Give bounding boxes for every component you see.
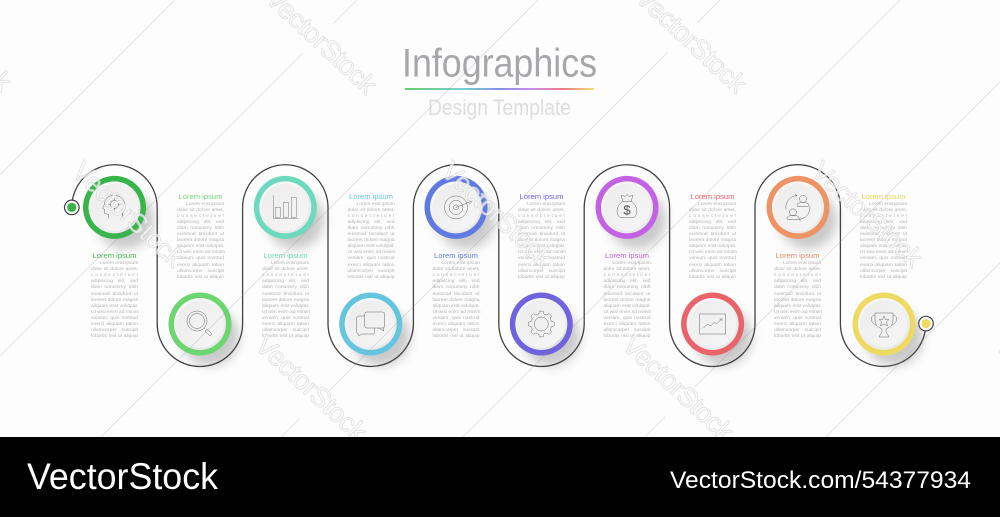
- icon: target: [444, 196, 472, 219]
- text block: step 9: adipiscing elit, sed: [774, 279, 821, 284]
- text block: step 8: dolor sit dolore amet,: [689, 208, 736, 213]
- text block: step 8: lobortis nisl ut aliquip: [689, 275, 736, 280]
- text block: step 4: euismod tincidunt ut: [348, 232, 394, 237]
- text block: step 9: Ut wisi enim ad minim: [774, 310, 822, 315]
- step 5 circle: target icon: [424, 176, 488, 239]
- step 6 circle: gear icon: [510, 292, 573, 356]
- text block: step 8: veniam, quis nostrud: [689, 256, 736, 261]
- text block: step 6: euismod tincidunt ut: [518, 232, 565, 237]
- text block: step 9: Lorem erat ipsum: [783, 261, 821, 266]
- text block: step 7: aliquam erat volutpat.: [604, 304, 651, 309]
- text block: step 2: Lorem ipsum: [179, 192, 222, 200]
- text block: step 6: consectetuer: [518, 214, 567, 219]
- icon: trophy: [871, 313, 897, 337]
- text block: step 4: adipiscing elit, sed: [348, 220, 394, 225]
- text block: step 3: ullamcorper suscipit: [262, 328, 309, 333]
- text block: step 6: ullamcorper suscipit: [518, 269, 565, 274]
- text block: step 5: dolor sit dolore amet,: [432, 267, 480, 272]
- icon: bar chart: [273, 195, 298, 218]
- text block: step 10: aliquam erat volutpat.: [860, 244, 907, 249]
- text block: step 4: exerci aliquam tation: [348, 263, 394, 268]
- text block: step 8: [689, 192, 738, 280]
- text block: step 7: euismod tincidunt ut: [604, 292, 650, 297]
- text block: step 7: consectetuer: [604, 273, 652, 278]
- text block: step 9: Lorem ipsum: [776, 251, 819, 260]
- text block: step 1: laoreet dolore magna: [91, 298, 138, 303]
- text block: step 5: Lorem ipsum: [434, 251, 478, 260]
- icon: head with gear: [102, 195, 125, 218]
- text block: step 1: lobortis nisl ut aliquip: [91, 334, 138, 339]
- text block: step 10: Lorem erat ipsum: [869, 202, 907, 206]
- text block: step 2: Ut wisi enim ad minim: [177, 250, 225, 255]
- brand name: VectorStock: [27, 456, 218, 497]
- text block: step 6: dolor sit dolore amet,: [518, 208, 565, 213]
- text block: step 9: veniam, quis nostrud: [774, 316, 821, 321]
- text block: step 2: [177, 192, 226, 280]
- image url: VectorStock.com/54377934: [670, 467, 971, 494]
- text block: step 10: lobortis nisl ut aliquip: [860, 275, 907, 280]
- step 2 circle: magnifier icon: [168, 292, 232, 356]
- subtitle: Design Template: [428, 95, 571, 120]
- text block: step 10: [860, 192, 909, 280]
- step shadows: [96, 191, 923, 366]
- step 1 circle: head with gear icon: [83, 176, 146, 239]
- text block: step 1: consectetuer: [91, 273, 140, 278]
- text block: step 9: exerci aliquam tation: [774, 322, 821, 327]
- text block: step 8: euismod tincidunt ut: [689, 232, 736, 237]
- text block: step 9: ullamcorper suscipit: [774, 328, 821, 333]
- text block: step 4: ullamcorper suscipit: [348, 269, 394, 274]
- text block: step 4: dolor sit dolore amet,: [348, 208, 394, 213]
- watermark overlay: VectorStock: [67, 156, 190, 273]
- text block: step 5: laoreet dolore magna: [432, 298, 480, 303]
- text block: step 9: euismod tincidunt ut: [774, 292, 821, 297]
- text block: step 7: dolor sit dolore amet,: [604, 267, 650, 272]
- text block: step 6: veniam, quis nostrud: [518, 256, 565, 261]
- step 8 circle: line chart icon: [681, 292, 744, 356]
- text block: step 3: Ut wisi enim ad minim: [262, 310, 310, 315]
- text block: step 10: exerci aliquam tation: [860, 263, 907, 268]
- text block: step 3: euismod tincidunt ut: [262, 292, 309, 297]
- text block: step 1: aliquam erat volutpat.: [91, 304, 138, 309]
- text block: step 4: aliquam erat volutpat.: [348, 244, 395, 249]
- text block: step 1: Ut wisi enim ad minim: [91, 310, 139, 315]
- text block: step 6: exerci aliquam tation: [518, 263, 565, 268]
- text block: step 5: euismod tincidunt ut: [432, 292, 480, 297]
- text block: step 5: consectetuer: [432, 273, 481, 278]
- text block: step 2: adipiscing elit, sed: [177, 220, 224, 225]
- text block: step 5: diam nonummy nibh: [432, 285, 480, 290]
- footer banner: [0, 437, 1000, 517]
- step 4 circle: speech bubbles icon: [339, 292, 402, 356]
- text block: step 3: veniam, quis nostrud: [262, 316, 309, 321]
- text block: step 6: laoreet dolore magna: [518, 238, 565, 243]
- text block: step 3: aliquam erat volutpat.: [262, 304, 309, 309]
- text block: step 10: laoreet dolore magna: [860, 238, 907, 243]
- text block: step 7: adipiscing elit, sed: [604, 279, 650, 284]
- text block: step 5: aliquam erat volutpat.: [432, 304, 480, 309]
- text block: step 5: lobortis nisl ut aliquip: [432, 334, 480, 339]
- text block: step 5: [432, 251, 481, 339]
- text block: step 3: [262, 251, 311, 339]
- text block: step 4: [348, 192, 396, 280]
- text block: step 1: euismod tincidunt ut: [91, 292, 138, 297]
- text block: step 9: aliquam erat volutpat.: [774, 304, 821, 309]
- title gradient rule: [405, 88, 594, 90]
- title: Infographics: [402, 42, 597, 86]
- text block: step 5: ullamcorper suscipit: [432, 328, 480, 333]
- text block: step 6: Ut wisi enim ad minim: [518, 250, 566, 255]
- text block: step 7: laoreet dolore magna: [604, 298, 650, 303]
- text block: step 4: diam nonummy nibh: [348, 226, 394, 231]
- text block: step 2: ullamcorper suscipit: [177, 269, 224, 274]
- text block: step 7: Lorem erat ipsum: [612, 261, 651, 266]
- text block: step 8: diam nonummy nibh: [689, 226, 736, 231]
- text block: step 6: [518, 192, 567, 280]
- step 7 circle: money bag icon: [596, 176, 658, 239]
- text block: step 6: Lorem ipsum: [520, 192, 563, 200]
- text block: step 1: diam nonummy nibh: [91, 285, 138, 290]
- text block: step 8: ullamcorper suscipit: [689, 269, 736, 274]
- step 10 circle: trophy icon: [852, 292, 916, 356]
- text block: step 5: Lorem erat ipsum: [442, 261, 480, 266]
- text block: step 3: lobortis nisl ut aliquip: [262, 334, 309, 339]
- text block: step 8: adipiscing elit, sed: [689, 220, 736, 225]
- text block: step 3: Lorem ipsum: [264, 251, 307, 260]
- start dot: [64, 200, 79, 215]
- text block: step 10: Lorem ipsum: [862, 192, 905, 200]
- text block: step 5: exerci aliquam tation: [432, 322, 480, 327]
- text block: step 7: Lorem ipsum: [605, 251, 649, 260]
- text block: step 8: laoreet dolore magna: [689, 238, 736, 243]
- step 9 circle: people cycle icon: [766, 176, 830, 239]
- text block: step 2: dolor sit dolore amet,: [177, 208, 224, 213]
- watermark overlay: VectorStock: [436, 156, 559, 273]
- text block: step 8: consectetuer: [689, 214, 738, 219]
- text block: step 10: dolor sit dolore amet,: [860, 208, 907, 213]
- text block: step 9: diam nonummy nibh: [774, 285, 821, 290]
- winding timeline path: [72, 165, 926, 366]
- text block: step 6: adipiscing elit, sed: [518, 220, 565, 225]
- text block: step 8: Lorem ipsum: [691, 192, 734, 200]
- text block: step 3: diam nonummy nibh: [262, 285, 309, 290]
- text block: step 10: euismod tincidunt ut: [860, 232, 907, 237]
- text block: step 3: consectetuer: [262, 273, 311, 278]
- text block: step 6: aliquam erat volutpat.: [518, 244, 565, 249]
- text block: step 3: dolor sit dolore amet,: [262, 267, 309, 272]
- text block: step 2: laoreet dolore magna: [177, 238, 224, 243]
- text block: step 2: veniam, quis nostrud: [177, 256, 224, 261]
- text block: step 7: Ut wisi enim ad minim: [604, 310, 652, 315]
- text block: step 8: exerci aliquam tation: [689, 263, 736, 268]
- text block: step 5: Ut wisi enim ad minim: [432, 310, 481, 315]
- text block: step 9: laoreet dolore magna: [774, 298, 821, 303]
- icon: line chart: [700, 314, 726, 334]
- text block: step 6: lobortis nisl ut aliquip: [518, 275, 565, 280]
- step 3 circle: bar chart icon: [254, 176, 317, 239]
- text block: step 2: lobortis nisl ut aliquip: [177, 275, 224, 280]
- text block: step 10: Ut wisi enim ad minim: [860, 250, 908, 255]
- text block: step 1: [91, 251, 140, 339]
- text block: step 10: diam nonummy nibh: [860, 226, 907, 231]
- icon: gear: [528, 311, 554, 337]
- text block: step 4: Lorem erat ipsum: [356, 202, 395, 206]
- text block: step 4: consectetuer: [348, 214, 396, 219]
- text block: step 3: exerci aliquam tation: [262, 322, 309, 327]
- text block: step 2: consectetuer: [177, 214, 226, 219]
- text block: step 7: [604, 251, 652, 339]
- text block: step 3: adipiscing elit, sed: [262, 279, 309, 284]
- text block: step 7: diam nonummy nibh: [604, 285, 650, 290]
- text block: step 6: diam nonummy nibh: [518, 226, 565, 231]
- text block: step 6: Lorem erat ipsum: [527, 202, 565, 206]
- text block: step 5: veniam, quis nostrud: [432, 316, 480, 321]
- icon: money bag: [617, 194, 637, 217]
- text block: step 2: exerci aliquam tation: [177, 263, 224, 268]
- text block: step 4: laoreet dolore magna: [348, 238, 394, 243]
- text block: step 1: Lorem erat ipsum: [100, 261, 138, 266]
- text block: step 3: Lorem erat ipsum: [271, 261, 309, 266]
- icon: magnifier: [187, 311, 212, 336]
- text block: step 7: ullamcorper suscipit: [604, 328, 650, 333]
- text block: step 1: Lorem ipsum: [93, 251, 136, 260]
- text block: step 5: adipiscing elit, sed: [432, 279, 480, 284]
- text block: step 1: veniam, quis nostrud: [91, 316, 138, 321]
- text block: step 8: aliquam erat volutpat.: [689, 244, 736, 249]
- text block: step 4: veniam, quis nostrud: [348, 256, 394, 261]
- text block: step 4: lobortis nisl ut aliquip: [348, 275, 394, 280]
- text block: step 7: lobortis nisl ut aliquip: [604, 334, 650, 339]
- text block: step 10: consectetuer: [860, 214, 909, 219]
- text block: step 4: Ut wisi enim ad minim: [348, 250, 396, 255]
- text block: step 10: adipiscing elit, sed: [860, 220, 907, 225]
- text block: step 1: dolor sit dolore amet,: [91, 267, 138, 272]
- text block: step 1: exerci aliquam tation: [91, 322, 138, 327]
- text block: step 9: [774, 251, 823, 339]
- text block: step 8: Lorem erat ipsum: [698, 202, 736, 206]
- text block: step 10: ullamcorper suscipit: [860, 269, 907, 274]
- text block: step 2: Lorem erat ipsum: [186, 202, 224, 206]
- dollar sign: $: [623, 202, 631, 217]
- watermark overlay: VectorStock: [806, 156, 929, 273]
- text block: step 9: consectetuer: [774, 273, 823, 278]
- text block: step 9: dolor sit dolore amet,: [774, 267, 821, 272]
- end dot: [919, 316, 933, 331]
- text block: step 8: Ut wisi enim ad minim: [689, 250, 737, 255]
- text block: step 7: veniam, quis nostrud: [604, 316, 650, 321]
- text block: step 1: ullamcorper suscipit: [91, 328, 138, 333]
- text block: step 3: laoreet dolore magna: [262, 298, 309, 303]
- text block: step 4: Lorem ipsum: [349, 192, 393, 200]
- text block: step 2: euismod tincidunt ut: [177, 232, 224, 237]
- text block: step 2: aliquam erat volutpat.: [177, 244, 224, 249]
- text block: step 2: diam nonummy nibh: [177, 226, 224, 231]
- icon: speech bubbles: [357, 312, 385, 336]
- text block: step 7: exerci aliquam tation: [604, 322, 650, 327]
- text block: step 1: adipiscing elit, sed: [91, 279, 138, 284]
- text block: step 10: veniam, quis nostrud: [860, 256, 907, 261]
- icon: people cycle: [786, 194, 810, 221]
- text block: step 9: lobortis nisl ut aliquip: [774, 334, 821, 339]
